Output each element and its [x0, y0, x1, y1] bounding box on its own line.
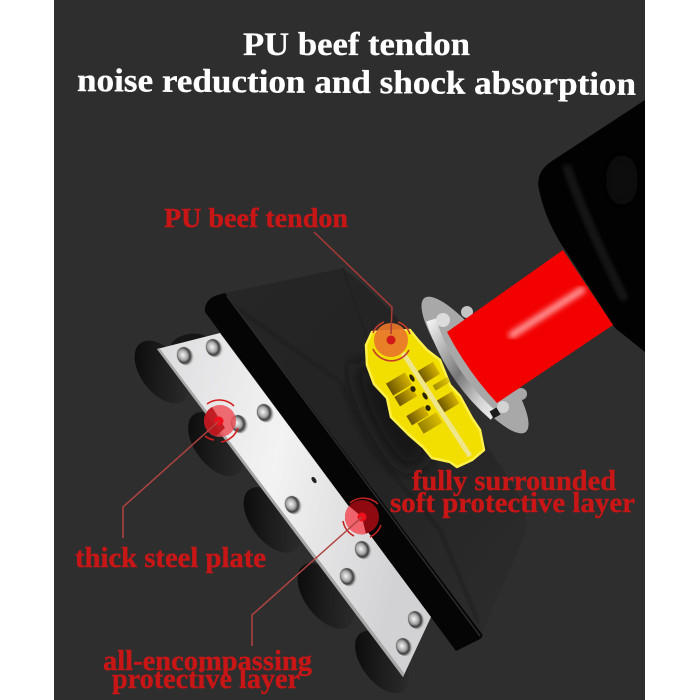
label: all-encompassing protective layer: all-encompassing	[103, 645, 312, 677]
flange bolts	[436, 306, 527, 418]
steel plate	[157, 333, 431, 677]
title	[77, 27, 636, 103]
black rim bar	[205, 293, 482, 651]
leader line: PU beef tendon	[314, 232, 392, 334]
label: all-encompassing protective layer: protective layer	[112, 663, 300, 695]
target marker: PU beef tendon	[373, 322, 410, 361]
label: fully surrounded soft protective layer: fully surrounded	[412, 465, 616, 497]
target marker: protective layer	[343, 498, 381, 537]
leader line: all-encompassing protective layer	[252, 517, 362, 646]
title: PU beef tendon	[243, 27, 470, 63]
yellow PU coupling	[366, 330, 484, 467]
title: noise reduction and shock absorption	[77, 63, 636, 103]
label: PU beef tendon: PU beef tendon	[164, 203, 348, 233]
plate bolts	[173, 336, 428, 659]
target marker: thick steel plate	[204, 400, 238, 442]
red cylinder shaft	[447, 250, 613, 403]
leader line: thick steel plate	[123, 421, 219, 538]
rubber pad behind plate	[225, 268, 527, 638]
black handle body	[538, 100, 645, 352]
metal mounting disc	[407, 285, 543, 445]
label: all-encompassing protective layer	[103, 645, 312, 695]
label: fully surrounded soft protective layer	[390, 465, 635, 519]
coupling windows	[386, 362, 459, 434]
label: thick steel plate: thick steel plate	[75, 542, 266, 574]
plate small hole	[310, 476, 318, 484]
suction feet	[124, 331, 420, 700]
label: fully surrounded soft protective layer: soft protective layer	[390, 487, 635, 519]
